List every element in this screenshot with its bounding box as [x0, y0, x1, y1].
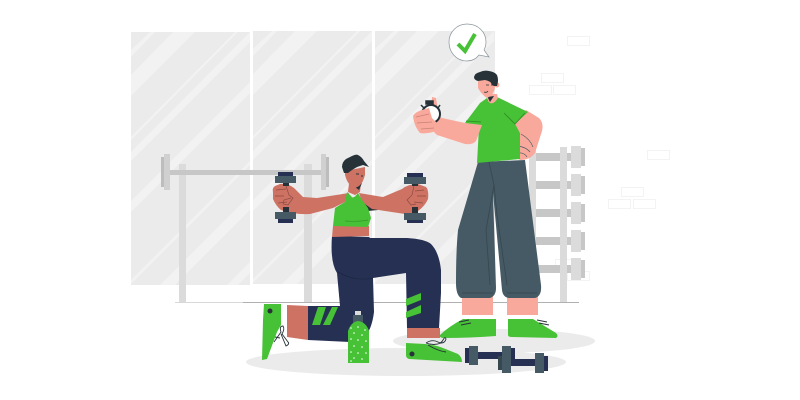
trainer thumb — [431, 97, 438, 110]
trainer figure — [413, 71, 558, 338]
dumbbells on floor — [465, 346, 548, 373]
water bottle — [348, 311, 369, 363]
background brick outlines — [530, 36, 670, 280]
barbell on stand — [161, 154, 329, 302]
dumbbell held right — [404, 173, 426, 223]
speech bubble with check mark — [449, 24, 489, 61]
trainer left arm — [432, 115, 482, 144]
dumbbell held left — [275, 172, 296, 223]
trainer ankles — [462, 295, 538, 315]
woman fists — [275, 186, 426, 205]
icon: stopwatch — [421, 101, 440, 123]
illustration: trainer timing a woman exercising with dumbbells — [131, 24, 670, 376]
woman torso skin — [332, 226, 369, 237]
woman front shoe — [406, 343, 462, 362]
trainer shirt — [465, 97, 528, 163]
trainer hand fingers — [413, 108, 437, 133]
icon: check mark — [458, 34, 475, 51]
woman front shin — [407, 328, 440, 338]
woman figure — [262, 155, 462, 362]
woman sports top — [333, 192, 371, 227]
gym windows — [131, 31, 495, 285]
woman shadow under arm — [361, 196, 378, 211]
woman neck and head — [342, 155, 369, 195]
trainer trousers — [456, 160, 541, 298]
woman arms — [273, 184, 428, 214]
weight rack — [529, 146, 585, 302]
woman back shin — [287, 305, 308, 340]
woman hair — [342, 155, 369, 173]
woman leggings — [308, 236, 441, 342]
trainer hair — [474, 71, 498, 86]
trainer neck and head — [474, 71, 500, 103]
floor shadows — [246, 329, 595, 376]
legging stripes — [312, 293, 421, 325]
trainer shoes — [440, 319, 558, 338]
floor line — [175, 302, 579, 304]
trainer right arm on hip — [509, 110, 543, 160]
woman back shoe — [262, 304, 281, 360]
